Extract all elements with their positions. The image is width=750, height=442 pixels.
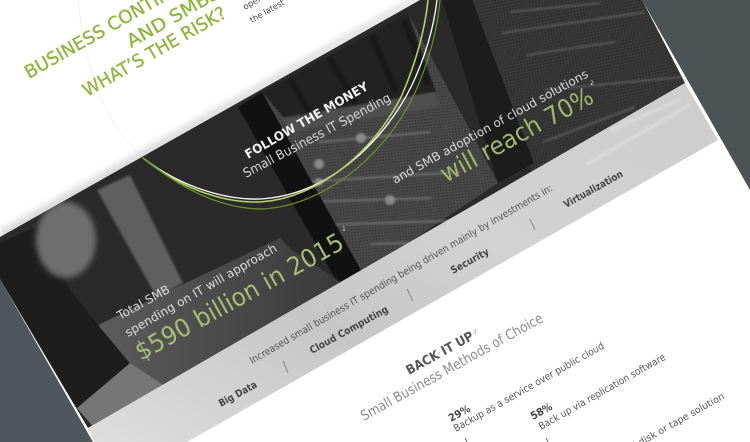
shadow above photo	[0, 0, 430, 242]
person skin	[36, 202, 96, 278]
person sleeve	[0, 225, 130, 408]
stat: 29%: 29%	[447, 403, 473, 425]
upper dark server bars	[262, 13, 436, 120]
central server rack	[262, 13, 498, 285]
heading: back it up: BACK IT UP	[404, 329, 477, 378]
heading: business continuity: WHAT’S THE RISK?	[79, 3, 230, 101]
stat: cloud adoption: will reach 70%	[435, 82, 598, 188]
investment categories: Virtualization	[562, 169, 625, 211]
laptop	[98, 238, 345, 390]
laptop lower side	[77, 363, 162, 426]
investment categories	[217, 169, 625, 410]
stat: SMB IT spending: Total SMB	[114, 282, 172, 323]
stat: 58%: Back up via replication software	[537, 352, 668, 433]
shelf top bar	[282, 92, 440, 132]
stat: SMB IT spending: spending on IT will approach	[122, 241, 279, 340]
stat: SMB IT spending: 1	[342, 226, 346, 233]
band caption: Increased small business IT spending being driven mainly by investments in:	[248, 183, 555, 367]
central rack shelves	[300, 132, 470, 244]
investment categories: Security	[449, 246, 492, 277]
heading: back it up: 3	[473, 329, 477, 336]
stat: 58%: 58%	[529, 401, 555, 423]
investment categories: Cloud Computing	[308, 304, 390, 357]
stat: cloud adoption: and SMB adoption of cloud solutions	[390, 67, 591, 187]
panel: grey investments band	[88, 83, 718, 442]
light pillar	[97, 175, 183, 298]
dark vertical column	[442, 0, 534, 183]
stat: 29%: Backup as a service over public cloud	[452, 341, 606, 435]
investment categories: Big Data	[217, 380, 259, 410]
column ticks	[465, 438, 548, 442]
stat: cloud adoption: 2	[590, 80, 594, 87]
panel: left dark page edge	[0, 279, 93, 442]
right rack rails	[502, 3, 682, 142]
black pillar	[238, 92, 362, 287]
panel: right dark page edge	[642, 0, 750, 190]
category separators	[283, 219, 535, 373]
server bar slots	[290, 20, 428, 112]
heading: follow the money: FOLLOW THE MONEY	[242, 78, 372, 162]
rack knobs	[314, 133, 395, 205]
band streaks	[585, 100, 690, 165]
stat: SMB IT spending: $590 billion in 2015	[130, 227, 349, 366]
subheading: small business IT spending: Small Business IT Spending	[241, 91, 394, 182]
subheading: methods of choice: Small Business Methods of Choice	[358, 311, 546, 424]
decorative circle rings	[78, 0, 440, 209]
right server rack	[472, 0, 685, 172]
